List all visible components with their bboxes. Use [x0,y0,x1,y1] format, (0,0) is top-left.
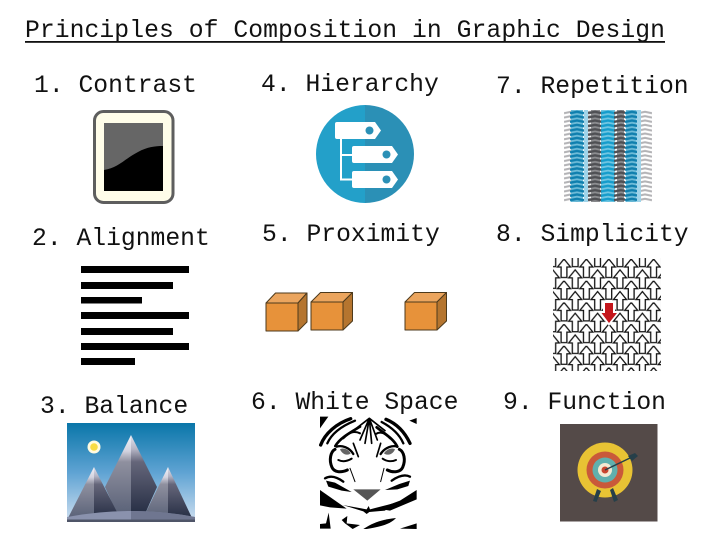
heading: 9. Function: 9. Function [503,389,666,417]
heading: 6. White Space: 6. White Space [251,389,458,417]
icon: target with arrow [560,424,658,522]
icon: hierarchy tags [316,105,414,203]
icon: balanced mountains [67,423,195,522]
heading: 2. Alignment: 2. Alignment [32,225,210,253]
heading: 1. Contrast: 1. Contrast [34,72,197,100]
heading: 3. Balance: 3. Balance [40,393,188,421]
heading: 7. Repetition: 7. Repetition [496,73,689,101]
icon: tiger face [320,417,417,529]
icon: proximity cubes [266,292,446,331]
icon: repeated chevrons [564,110,652,202]
icon: aligned text bars [81,266,189,365]
icon: tessellated arrows with red arrow [553,258,661,371]
icon: contrast tablet [94,112,173,202]
title: Principles of Composition in Graphic Design [25,17,665,45]
heading: 8. Simplicity: 8. Simplicity [496,221,689,249]
heading: 4. Hierarchy: 4. Hierarchy [261,71,439,99]
heading: 5. Proximity: 5. Proximity [262,221,440,249]
